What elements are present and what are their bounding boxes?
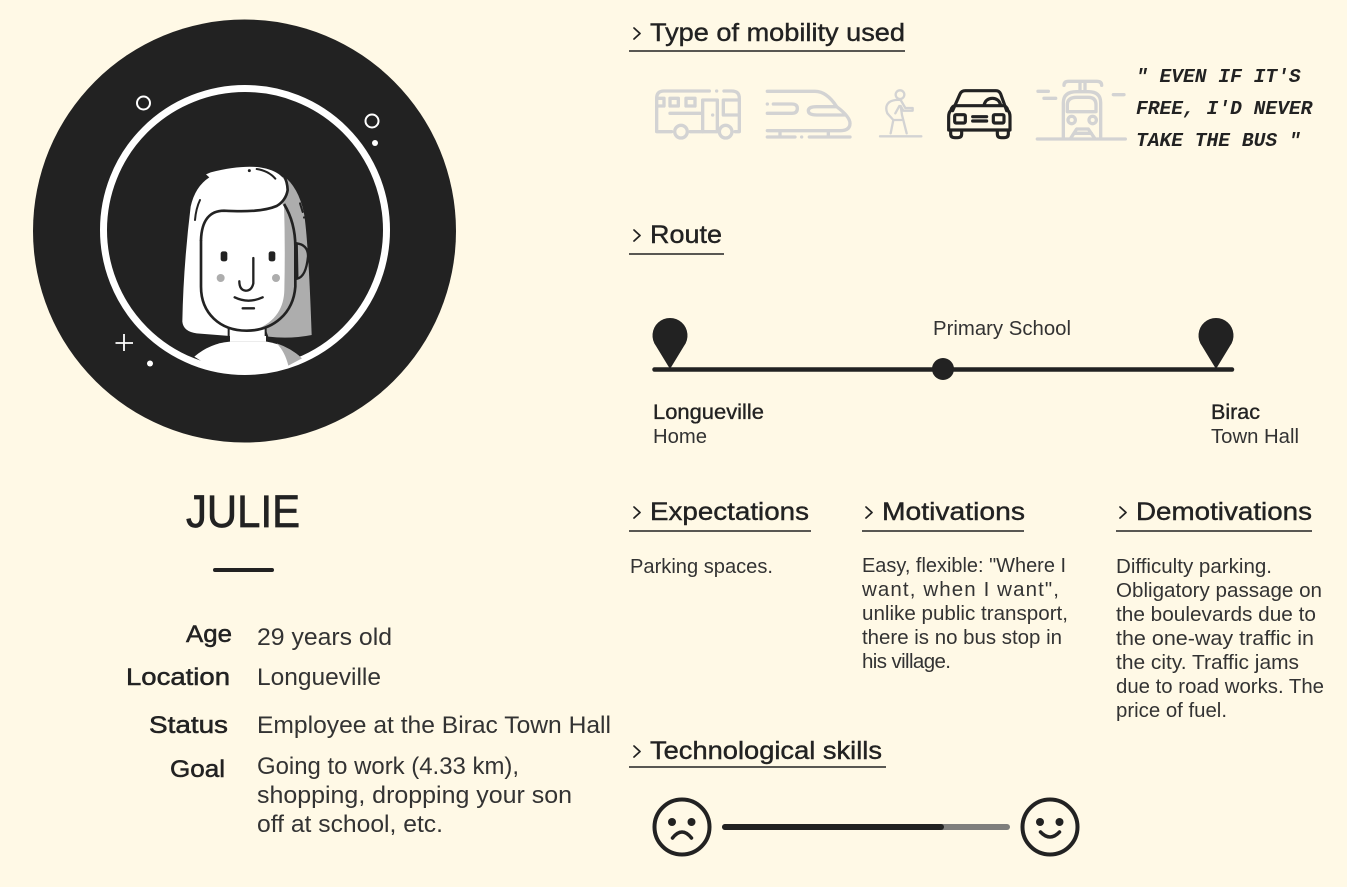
- skill level bar: [722, 824, 1010, 830]
- label: Birac: Birac: [1211, 401, 1260, 424]
- label: Longueville: Longueville: [653, 401, 764, 424]
- icon: bus: [657, 91, 739, 138]
- heading: Expectations: Expectations: [650, 498, 809, 526]
- age value: 29 years old: [257, 624, 392, 651]
- heading: Expectations: [629, 498, 811, 531]
- goal value: off at school, etc.: [257, 811, 443, 838]
- goal value: [257, 753, 572, 838]
- route timeline: [652, 317, 1299, 448]
- label: Town Hall: Town Hall: [1211, 425, 1299, 448]
- text: demotivations: due to road works. The: [1116, 675, 1324, 698]
- text: motivations: there is no bus stop in: [862, 626, 1062, 649]
- quote: " EVEN IF IT'S: [1136, 66, 1301, 88]
- goal label: Goal: [170, 756, 225, 783]
- goal value: Going to work (4.33 km),: [257, 753, 519, 780]
- pin: home: [652, 318, 688, 369]
- text: demotivations: the city. Traffic jams: [1116, 651, 1299, 674]
- text: motivations: unlike public transport,: [862, 602, 1068, 625]
- label: Home: Home: [653, 425, 707, 448]
- quote: [1136, 66, 1313, 152]
- icon: happy face: [1022, 800, 1078, 854]
- icon: tram: [1037, 81, 1125, 139]
- heading: Type of mobility used: Type of mobility used: [650, 19, 905, 47]
- portrait: Julie avatar: [33, 20, 456, 442]
- age label: Age: [186, 621, 232, 648]
- text: demotivations: Obligatory passage on: [1116, 579, 1322, 602]
- icon: high-speed train: [767, 91, 850, 137]
- text: demotivations: price of fuel.: [1116, 699, 1227, 722]
- name: JULIE: JULIE: [186, 486, 300, 537]
- status label: Status: [149, 712, 228, 739]
- text: motivations: [861, 554, 1068, 673]
- text: demotivations: Difficulty parking.: [1116, 555, 1272, 578]
- name divider: [213, 568, 274, 572]
- text: expectations: Parking spaces.: [630, 555, 773, 578]
- heading: Route: [629, 221, 724, 254]
- location value: Longueville: [257, 664, 381, 691]
- text: motivations: Easy, flexible: "Where I: [862, 554, 1066, 577]
- quote: TAKE THE BUS ": [1136, 130, 1301, 152]
- pin: town hall: [1199, 318, 1234, 369]
- text: demotivations: [1116, 555, 1324, 722]
- text: demotivations: the one-way traffic in: [1116, 627, 1314, 650]
- text: motivations: his village.: [862, 650, 951, 673]
- stop: primary school: [932, 358, 954, 380]
- icon: pedestrian: [880, 90, 921, 136]
- heading: Demotivations: Demotivations: [1136, 498, 1312, 526]
- heading: Route: Route: [650, 221, 722, 249]
- icon: car (selected): [949, 91, 1010, 138]
- icon: sad face: [654, 800, 710, 854]
- goal value: shopping, dropping your son: [257, 782, 572, 809]
- text: motivations: want, when I want",: [861, 578, 1059, 601]
- heading: Technological skills: Technological skills: [650, 737, 882, 765]
- status value: Employee at the Birac Town Hall: [257, 712, 611, 739]
- label: primary school: Primary School: [933, 317, 1071, 340]
- heading: Motivations: [862, 498, 1025, 531]
- heading: Motivations: Motivations: [882, 498, 1025, 526]
- text: demotivations: the boulevards due to: [1116, 603, 1316, 626]
- location label: Location: [126, 664, 230, 691]
- heading: Demotivations: [1116, 498, 1312, 531]
- quote: FREE, I'D NEVER: [1136, 98, 1313, 120]
- profile details: [126, 621, 611, 838]
